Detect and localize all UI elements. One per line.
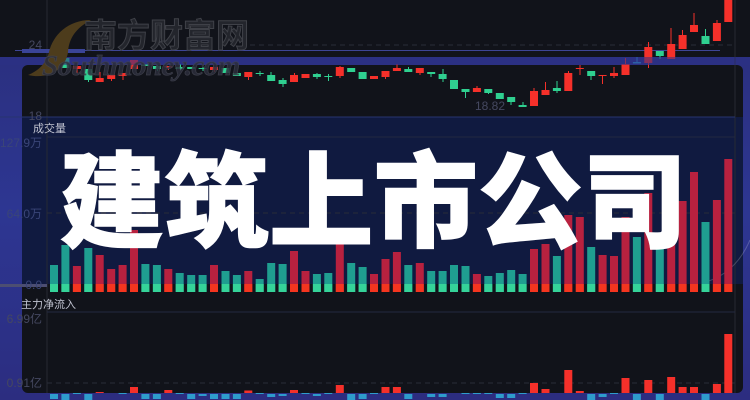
axis label: 0.91亿: 0.91亿 (7, 375, 42, 390)
heading: main net inflow: 主力净流入 (21, 297, 76, 311)
watermark crescent (28, 20, 91, 76)
axis label: 127.9万: 127.9万 (0, 136, 42, 150)
axis label: 18: 18 (29, 109, 42, 123)
axis label: 6.99亿: 6.99亿 (7, 311, 42, 326)
net inflow bars (50, 334, 732, 400)
heading: volume: 成交量 (33, 121, 66, 135)
axis label: 64.0万: 64.0万 (7, 207, 42, 221)
axis label: 24: 24 (29, 38, 42, 52)
navy volume panel (22, 117, 743, 284)
dark inner panel (22, 65, 743, 393)
top frame band (0, 57, 750, 65)
main title: 建筑上市公司 (60, 118, 688, 269)
axis label: 0.0: 0.0 (25, 278, 42, 292)
watermark web address: Southmoney.com (42, 50, 240, 82)
lowest price label: 18.82 (475, 99, 505, 113)
volume bars (50, 159, 732, 292)
watermark logo (28, 17, 249, 82)
watermark Chinese name: 南方财富网 (84, 17, 249, 54)
candlestick chart (50, 0, 732, 107)
